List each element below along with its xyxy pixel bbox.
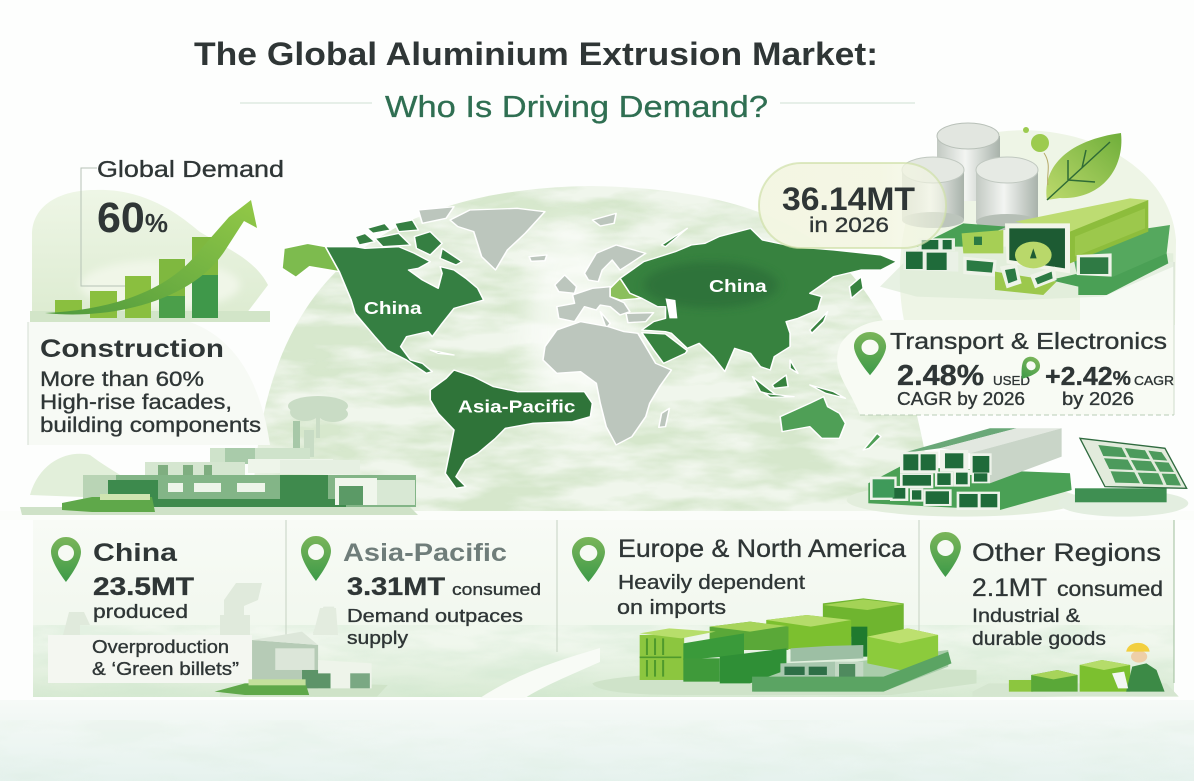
stat: 3.31MT: 3.31MT — [347, 573, 445, 601]
Caspian Sea — [666, 298, 677, 318]
heading: Europe and North America: Europe & North America — [618, 535, 906, 563]
stat: 23.5MT: 23.5MT — [93, 573, 194, 601]
text: more than 60%: More than 60% — [40, 368, 204, 391]
illustration: shipping containers — [592, 598, 977, 695]
icon: location pin — [930, 532, 961, 577]
bar chart — [55, 237, 218, 318]
text: in 2026: in 2026 — [809, 214, 889, 237]
world map background wash — [0, 186, 1194, 520]
text: consumed: consumed — [1057, 578, 1163, 601]
icon: location pin — [572, 537, 605, 582]
illustration: factory — [20, 396, 418, 515]
billet: rear — [937, 123, 1000, 201]
stat: 2.1MT: 2.1MT — [972, 574, 1047, 602]
ghost tree — [288, 396, 348, 438]
stat: +2.42%: +2.42% — [1045, 361, 1131, 391]
illustration: profile stack and solar panel — [847, 428, 1188, 517]
arrow: rising trend — [45, 200, 257, 314]
text: demand outpaces: Demand outpaces — [347, 606, 523, 626]
region card: Europe and North America — [572, 535, 977, 695]
billet: left — [902, 157, 964, 228]
ghost lamp — [313, 608, 338, 635]
region: Greenland and Europe and Africa (grey) — [418, 207, 671, 445]
text: cagr by 2026: CAGR by 2026 — [897, 389, 1025, 409]
region: Australia and New Zealand — [780, 397, 881, 450]
text: produced: produced — [93, 602, 188, 623]
heading: transport and electronics: Transport & Electronics — [890, 328, 1167, 354]
truck — [62, 497, 155, 512]
text: on imports: on imports — [617, 597, 726, 619]
text box — [48, 635, 252, 683]
text: green billets: & ‘Green billets” — [92, 659, 239, 679]
green backdrop: top right — [900, 130, 1176, 325]
illustration: extruded profiles, top right — [880, 198, 1173, 300]
text: facades: High-rise facades, — [40, 391, 232, 414]
region: Eurasia (dark green) — [620, 228, 897, 398]
darker Russia shading — [644, 262, 778, 308]
icon: location pin — [51, 537, 81, 582]
callout: 36.14MT in 2026 — [759, 163, 946, 248]
region card: Other Regions — [930, 532, 1179, 697]
stat: 2.48%: 2.48% — [897, 360, 984, 392]
illustration: plant and truck — [215, 607, 388, 697]
region: North America (dark green) — [325, 220, 484, 373]
heading: Asia-Pacific: Asia-Pacific — [343, 539, 507, 567]
illustration: containers and worker — [972, 643, 1179, 697]
region: Ukraine (light green) — [610, 278, 642, 300]
world map — [282, 207, 897, 488]
text: by 2026: by 2026 — [1062, 389, 1134, 409]
illustration: aluminium billets — [902, 123, 1038, 230]
map label: Asia-Pacific: Asia-Pacific — [458, 397, 575, 417]
region: Alaska (light green) — [282, 243, 339, 277]
subtitle: Who Is Driving Demand? — [385, 89, 768, 124]
text: durable goods: durable goods — [972, 629, 1106, 650]
text: heavily dependent: Heavily dependent — [618, 572, 805, 594]
region card: Asia-Pacific — [301, 536, 541, 648]
stat: 60%: 60% — [97, 194, 168, 242]
panel backing: transport and electronics — [1080, 262, 1174, 325]
billet: right — [976, 157, 1038, 230]
chimneys — [293, 421, 300, 457]
map label: China (North America): China — [364, 298, 423, 319]
stat: 36.14MT: 36.14MT — [782, 181, 915, 217]
text: cagr: CAGR — [1134, 373, 1174, 388]
text: components: building components — [40, 414, 261, 437]
panel: construction — [28, 322, 270, 445]
icon: leaf — [1023, 127, 1121, 200]
worker — [1126, 663, 1165, 692]
text: industrial: Industrial & — [972, 606, 1080, 627]
ghost factory — [62, 583, 262, 682]
panel: regional breakdown background — [33, 520, 1174, 698]
title: The Global Aluminium Extrusion Market: — [194, 36, 878, 72]
panel: global demand — [30, 156, 284, 322]
text: supply: supply — [347, 628, 408, 648]
region card: China — [48, 537, 262, 683]
heading: construction: Construction — [40, 335, 224, 363]
heading: China: China — [93, 539, 178, 567]
heading: global demand: Global Demand — [97, 156, 284, 182]
icon: location pin — [854, 332, 886, 375]
heading: Other Regions: Other Regions — [972, 539, 1161, 567]
icon: location pin — [301, 536, 331, 581]
map label: China (Eurasia): China — [709, 276, 768, 297]
text: overproduction: Overproduction — [92, 637, 229, 657]
panel: transport and electronics — [837, 262, 1174, 415]
text: consumed: consumed — [452, 580, 541, 599]
icon: small pin — [1014, 353, 1043, 384]
region: South America (dark green with label bulge) — [430, 370, 592, 488]
text: used: USED — [993, 373, 1030, 388]
